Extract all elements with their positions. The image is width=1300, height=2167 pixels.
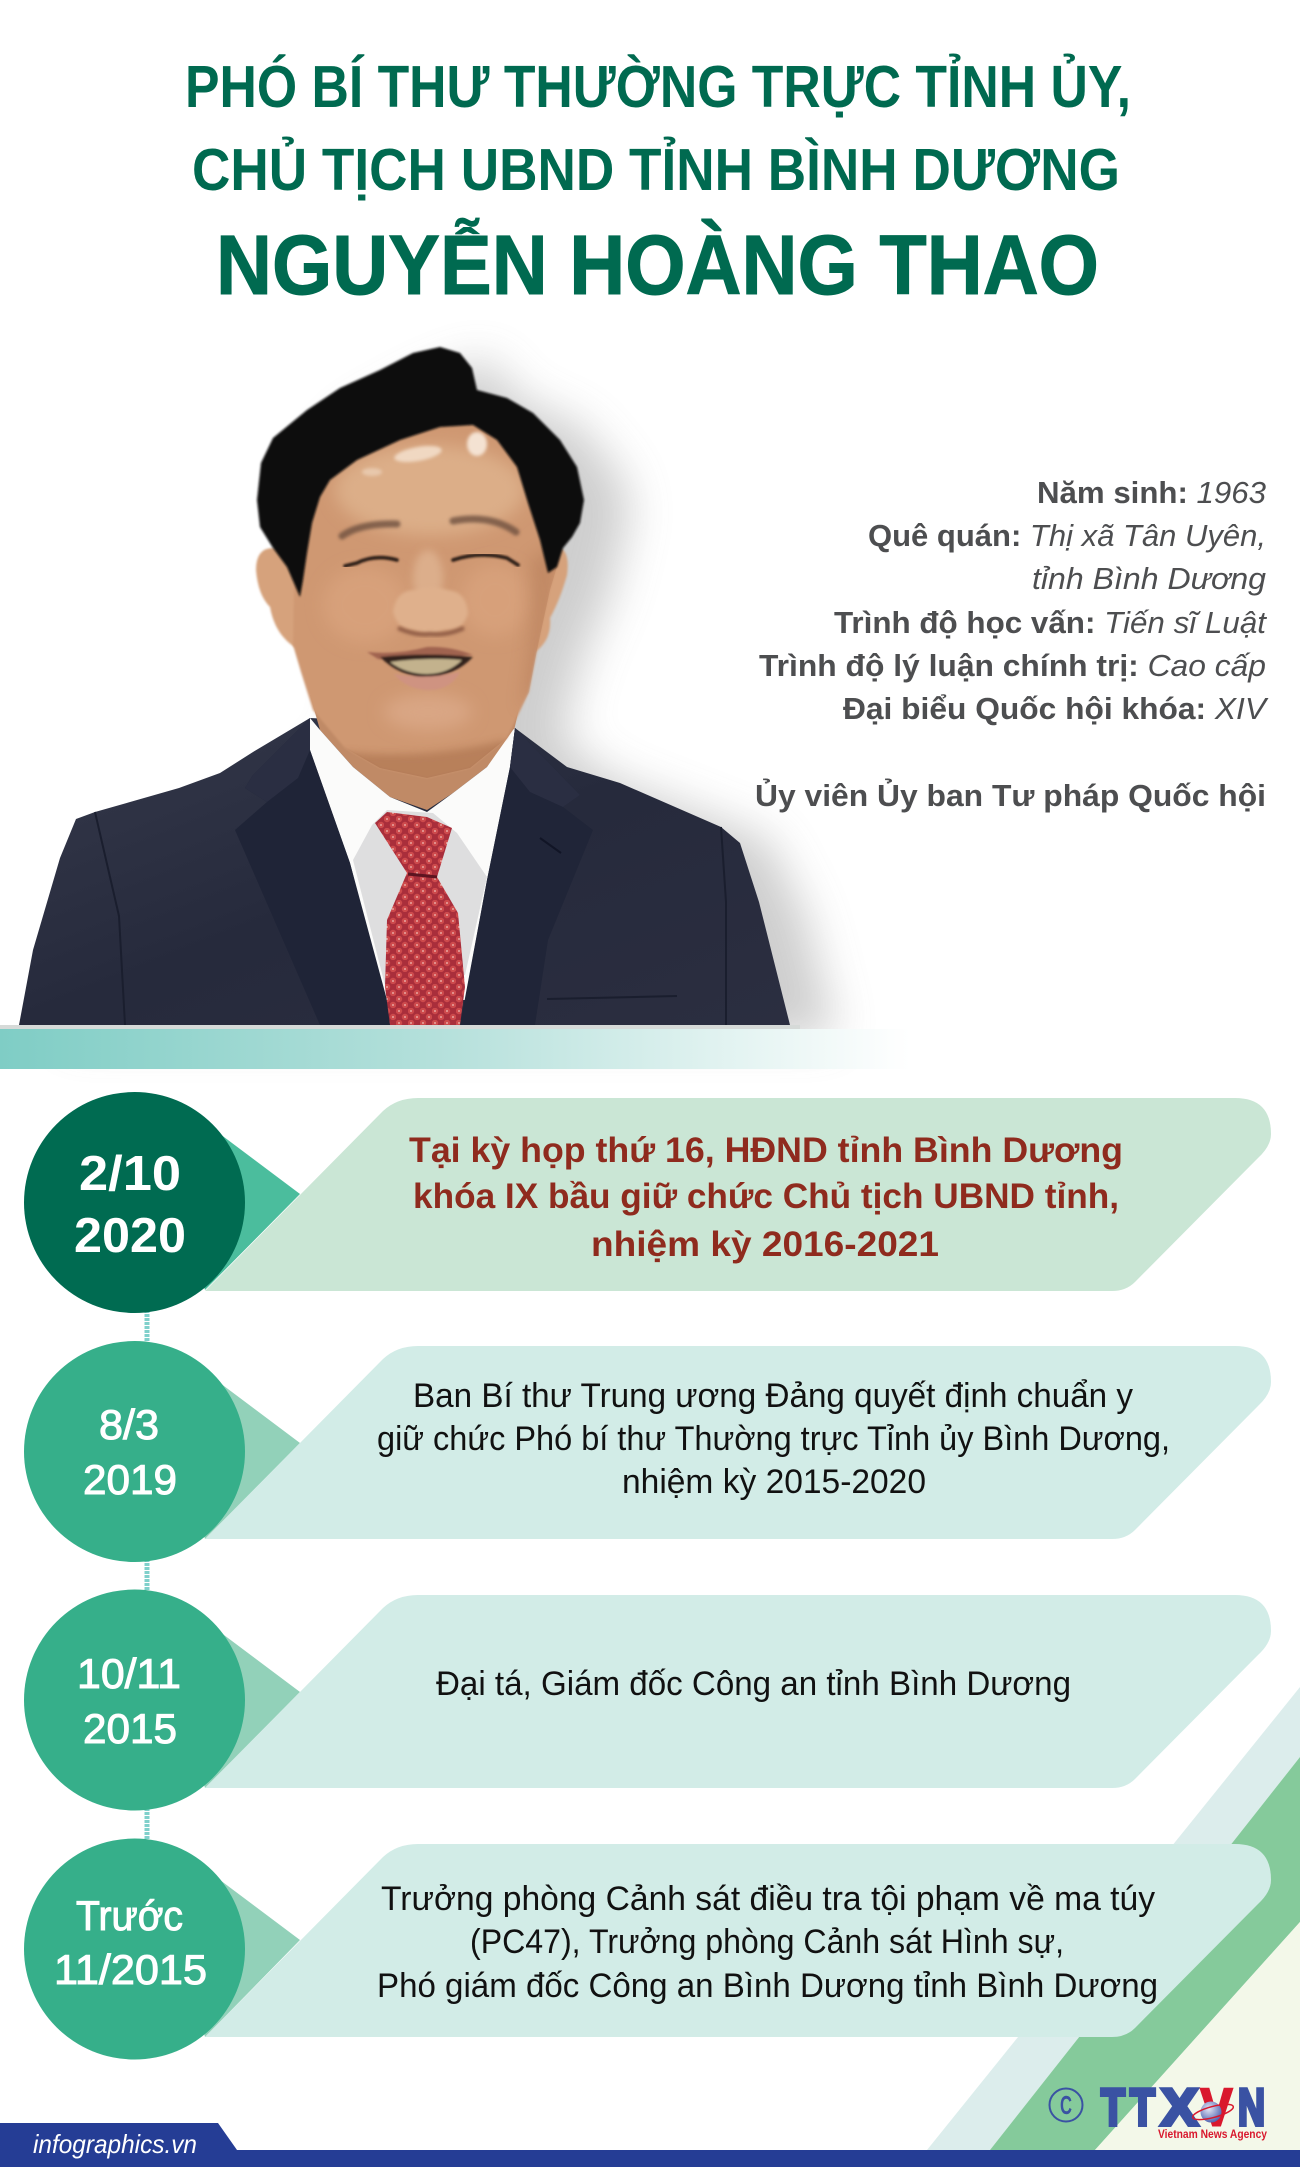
- profile info: Trình độ lý luận chính trị: Cao cấp: [759, 648, 1266, 683]
- date: [77, 1650, 181, 1752]
- timeline item 1: [24, 1092, 1271, 1313]
- shirt inner shadow: [353, 810, 487, 997]
- date: 11/2015: [54, 1946, 207, 1993]
- eyebrows: [342, 519, 516, 536]
- TTXVN logo: [1101, 2079, 1267, 2141]
- right lapel: [460, 728, 593, 1025]
- TTXVN logo: T: [1101, 2079, 1125, 2137]
- tie knot: [375, 812, 452, 877]
- forehead highlights: [362, 432, 487, 476]
- event band: [205, 1844, 1271, 2037]
- profile info: tỉnh Bình Dương: [1032, 561, 1266, 596]
- event band: [205, 1346, 1271, 1539]
- date: [54, 1892, 207, 1993]
- event text: nhiệm kỳ 2016-2021: [591, 1225, 939, 1264]
- gradient strip: [0, 1029, 910, 1069]
- photo base line: [0, 1025, 800, 1029]
- pointer: [180, 1383, 300, 1539]
- lapel notch: [540, 838, 561, 853]
- event band: [205, 1595, 1271, 1788]
- mouth: [367, 647, 473, 690]
- hair: [257, 347, 584, 597]
- chin highlight: [384, 694, 472, 730]
- agency name: Vietnam News Agency: [1158, 2127, 1267, 2141]
- event text: nhiệm kỳ 2015-2020: [622, 1463, 926, 1501]
- tie: [385, 873, 465, 1025]
- suit: [19, 718, 790, 1025]
- portrait: [19, 347, 836, 1037]
- profile info: Đại biểu Quốc hội khóa: XIV: [843, 691, 1269, 726]
- date: [74, 1147, 186, 1263]
- profile info: Trình độ học vấn: Tiến sĩ Luật: [834, 605, 1267, 640]
- right cheek tone: [476, 578, 514, 622]
- date: 2015: [83, 1705, 177, 1752]
- forehead tone: [335, 445, 525, 535]
- title: PHÓ BÍ THƯ THƯỜNG TRỰC TỈNH ỦY,: [185, 53, 1131, 120]
- face shading: [323, 445, 562, 790]
- jaw shadow: [351, 740, 502, 778]
- event text: [377, 1377, 1170, 1501]
- event text: Tại kỳ họp thứ 16, HĐND tỉnh Bình Dương: [409, 1131, 1123, 1170]
- globe: [1200, 2102, 1222, 2122]
- nose: [393, 588, 468, 634]
- title: CHỦ TỊCH UBND TỈNH BÌNH DƯƠNG: [192, 136, 1120, 203]
- title: NGUYỄN HOÀNG THAO: [216, 218, 1099, 312]
- TTXVN logo: V: [1201, 2079, 1232, 2137]
- event text: (PC47), Trưởng phòng Cảnh sát Hình sự,: [470, 1923, 1064, 1961]
- date: 8/3: [99, 1401, 159, 1448]
- date circle: [24, 1092, 245, 1313]
- face: [293, 415, 559, 778]
- event text: Trưởng phòng Cảnh sát điều tra tội phạm về ma túy: [381, 1880, 1155, 1918]
- event text: Phó giám đốc Công an Bình Dương tỉnh Bình Dương: [377, 1967, 1158, 2005]
- title: [185, 53, 1131, 312]
- orbit: [1191, 2101, 1235, 2123]
- lower lip: [394, 672, 460, 690]
- date circle: [24, 1590, 245, 1810]
- date: [83, 1401, 177, 1503]
- profile info: Năm sinh: 1963: [1037, 475, 1266, 510]
- event text: khóa IX bầu giữ chức Chủ tịch UBND tỉnh,: [413, 1177, 1119, 1216]
- event text: Đại tá, Giám đốc Công an tỉnh Bình Dương: [436, 1665, 1071, 1703]
- TTXVN logo: T: [1130, 2079, 1155, 2137]
- left upper collar: [245, 718, 310, 802]
- right upper collar: [510, 728, 580, 807]
- left lapel: [235, 718, 390, 1025]
- right ear: [528, 548, 568, 652]
- pointer: [180, 1880, 300, 2037]
- pointer: [180, 1134, 300, 1290]
- footer site name: infographics.vn: [33, 2129, 197, 2159]
- shirt: [310, 718, 515, 1000]
- event band: [205, 1098, 1271, 1291]
- TTXVN logo: X: [1161, 2079, 1198, 2137]
- timeline item 4: [24, 1838, 1271, 2060]
- date circle: [24, 1838, 245, 2060]
- eyes: [345, 555, 518, 566]
- timeline item 2: [24, 1341, 1271, 1562]
- nose bridge: [413, 550, 443, 606]
- mouth opening: [380, 654, 473, 677]
- footer bar: [0, 2123, 1300, 2167]
- profile info: [755, 475, 1269, 813]
- date: 2019: [83, 1456, 177, 1503]
- event text: [409, 1131, 1123, 1264]
- event text: [377, 1880, 1158, 2005]
- sleeve seams and pocket: [95, 812, 726, 1025]
- timeline connectors: [144, 1310, 150, 1843]
- nose shade: [398, 628, 464, 634]
- upper lip: [367, 647, 473, 660]
- decorative corner stripes: [927, 1687, 1300, 2150]
- profile info: Ủy viên Ủy ban Tư pháp Quốc hội: [755, 777, 1266, 813]
- date circle: [24, 1341, 245, 1562]
- pointer: [180, 1632, 300, 1788]
- tie knot shade: [408, 874, 437, 877]
- left ear: [256, 548, 308, 648]
- copyright icon: C: [1060, 2090, 1072, 2120]
- teeth: [390, 659, 462, 674]
- side shadow: [525, 554, 556, 700]
- neck: [310, 695, 522, 810]
- date: 2020: [74, 1209, 186, 1263]
- date: 2/10: [79, 1147, 181, 1201]
- left cheek tone: [338, 580, 392, 630]
- copyright icon: [1050, 2088, 1082, 2122]
- date: 10/11: [77, 1650, 181, 1697]
- event text: Ban Bí thư Trung ương Đảng quyết định chuẩn y: [413, 1377, 1133, 1415]
- timeline item 3: [24, 1590, 1271, 1810]
- date: Trước: [76, 1892, 183, 1939]
- profile info: Quê quán: Thị xã Tân Uyên,: [868, 518, 1266, 553]
- event text: giữ chức Phó bí thư Thường trực Tỉnh ủy Bình Dương,: [377, 1420, 1170, 1458]
- portrait shadow: [65, 359, 836, 1037]
- TTXVN logo: N: [1238, 2079, 1265, 2137]
